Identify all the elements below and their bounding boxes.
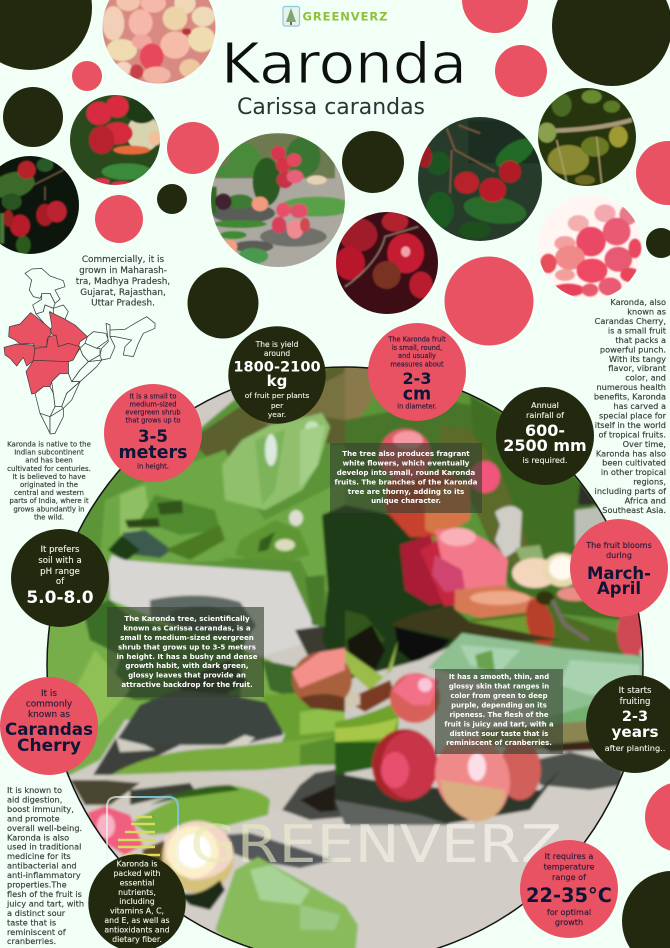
text: health benefits: anti-inflammatory bbox=[7, 870, 81, 880]
callout: temperature: growth bbox=[555, 917, 583, 927]
text: introduction: itself in the world bbox=[595, 420, 666, 430]
callout: soil pH bbox=[11, 529, 109, 627]
callout: height: in height. bbox=[137, 462, 169, 470]
callout: fruit size: measures about bbox=[390, 360, 444, 368]
text: introduction: numerous health bbox=[596, 382, 666, 392]
text: health benefits: cranberries. bbox=[7, 936, 56, 946]
text: native origin: the wild. bbox=[34, 513, 64, 521]
text box: skin and flesh: reminiscent of cranberries. bbox=[446, 739, 552, 747]
text box: skin and flesh bbox=[435, 669, 563, 754]
photo: red fruits on leafy branch bbox=[70, 95, 160, 185]
text: health benefits: overall well-being. bbox=[7, 823, 82, 833]
text box: tree description: growth habit, with dark green, bbox=[125, 661, 249, 670]
text box: tree description: The Karonda tree, scientifically bbox=[124, 614, 250, 623]
callout: temperature: temperature bbox=[544, 862, 594, 872]
text box: skin and flesh: fruit is juicy and tart, with a bbox=[444, 720, 554, 728]
text: health benefits: properties.The bbox=[7, 880, 67, 890]
text: native origin: parts of India, where it bbox=[9, 497, 89, 505]
callout: yield: around bbox=[264, 349, 290, 358]
photo: pile of pale karonda fruit bbox=[102, 0, 216, 84]
callout: fruit size: The Karonda fruit bbox=[387, 336, 446, 344]
text box: skin and flesh: distinct sour taste that is bbox=[450, 730, 548, 738]
callout: bloom season: March- bbox=[587, 564, 651, 583]
text box: flowers and thorns bbox=[330, 443, 482, 513]
callout: fruit size bbox=[368, 323, 466, 421]
text: introduction: With its tangy bbox=[609, 354, 666, 364]
callout: yield: of fruit per plants bbox=[245, 391, 309, 400]
text: introduction: including parts of bbox=[595, 486, 667, 496]
text: native origin: central and western bbox=[14, 489, 84, 497]
callout: yield: year. bbox=[268, 410, 286, 419]
photo: close-up of glossy crimson fruit bbox=[336, 212, 438, 314]
callout: nutrients: antioxidants and bbox=[104, 925, 170, 934]
text: commercial growing regions bbox=[76, 255, 170, 308]
text box: skin and flesh: color from green to deep bbox=[450, 692, 548, 700]
callout: bloom season: The fruit blooms bbox=[585, 541, 652, 550]
callout: fruiting age: years bbox=[612, 723, 658, 741]
callout: rainfall: is required. bbox=[522, 456, 568, 465]
title: Karonda bbox=[221, 32, 467, 97]
text: introduction: regions, bbox=[633, 477, 666, 487]
text: introduction: Over time, bbox=[623, 439, 666, 449]
icon: tree logo bbox=[283, 6, 300, 26]
callout: common name: commonly bbox=[26, 700, 72, 710]
text: introduction: color, and bbox=[625, 373, 666, 383]
subtitle: scientific name: Carissa carandas bbox=[237, 95, 425, 120]
callout: height: that grows up to bbox=[125, 416, 181, 424]
text: introduction: been cultivated bbox=[602, 458, 666, 468]
text: health benefits: taste that is bbox=[7, 917, 56, 927]
callout: fruit size: and usually bbox=[398, 352, 436, 360]
text: native origin: originated in the bbox=[20, 481, 78, 489]
text: introduction: is a small fruit bbox=[608, 325, 667, 335]
text box: flowers and thorns: unique character. bbox=[371, 496, 441, 505]
text: native origin: grows abundantly in bbox=[13, 505, 85, 513]
text: health benefits: reminiscent of bbox=[7, 927, 67, 937]
callout: yield bbox=[228, 326, 326, 424]
text: introduction: flavor, vibrant bbox=[608, 363, 667, 373]
text: introduction bbox=[594, 297, 667, 515]
callout: rainfall: 600- bbox=[525, 421, 565, 440]
text: introduction: that packs a bbox=[615, 335, 666, 345]
callout: common name: known as bbox=[28, 710, 70, 720]
callout: fruit size: is small, round, bbox=[392, 344, 442, 352]
callout: rainfall: Annual bbox=[531, 401, 559, 410]
callout: nutrients: and E, as well as bbox=[104, 916, 170, 925]
callout: temperature: for optimal bbox=[547, 907, 591, 917]
large circular illustration of karonda fruit and leaves bbox=[30, 350, 660, 948]
photo: bright pink fruit pile on white bbox=[538, 195, 642, 299]
text: introduction: Africa and bbox=[625, 496, 666, 506]
callout: nutrients: vitamins A, C, bbox=[110, 907, 164, 916]
callout: height: medium-sized bbox=[129, 400, 177, 408]
text box: skin and flesh: It has a smooth, thin, and bbox=[449, 673, 549, 681]
callout: bloom season: April bbox=[597, 579, 641, 598]
text box: flowers and thorns: tree are thorny, adding to its bbox=[348, 487, 464, 496]
callout: fruiting age: after planting.. bbox=[605, 743, 665, 753]
callout: soil pH: 5.0-8.0 bbox=[26, 588, 94, 608]
text: health benefits: It is known to bbox=[7, 785, 62, 795]
callout: fruiting age: 2-3 bbox=[622, 709, 648, 725]
text box: skin and flesh: ripeness. The flesh of the bbox=[449, 711, 549, 719]
callout: nutrients: dietary fiber. bbox=[112, 935, 162, 944]
callout: fruiting age bbox=[586, 675, 670, 773]
text: commercial growing regions: grown in Maharash- bbox=[79, 266, 167, 276]
text: introduction: has carved a bbox=[613, 401, 666, 411]
text: introduction: Southeast Asia. bbox=[602, 505, 666, 515]
logo bbox=[283, 6, 388, 26]
callout: nutrients: Karonda is bbox=[117, 860, 157, 868]
text: health benefits: flesh of the fruit is bbox=[7, 889, 82, 899]
text box: tree description: glossy leaves that provide an bbox=[128, 671, 246, 680]
callout: soil pH: of bbox=[56, 577, 65, 587]
text: commercial growing regions: Commercially, it is bbox=[82, 255, 165, 265]
callout: yield: The is yield bbox=[255, 340, 299, 349]
text: native origin: It is believed to have bbox=[12, 473, 86, 481]
callout: common name bbox=[0, 677, 98, 775]
callout: common name: Carandas bbox=[5, 719, 93, 739]
photo: dark red fruits with black background bbox=[0, 155, 80, 255]
text box: tree description: in height. It has a bushy and dense bbox=[116, 652, 258, 661]
photo: fruit clusters on stone ground bbox=[211, 133, 345, 267]
text box: tree description: shrub that grows up to 3-5 meters bbox=[118, 642, 256, 651]
text: health benefits: boost immunity, bbox=[7, 804, 74, 814]
callout: yield: 1800-2100 bbox=[233, 358, 321, 376]
text box: flowers and thorns: The tree also produces fragrant bbox=[342, 449, 470, 458]
callout: height: 3-5 bbox=[138, 427, 168, 446]
text box: tree description: small to medium-sized evergreen bbox=[120, 633, 254, 642]
callout: height: meters bbox=[119, 443, 187, 463]
text: health benefits: and promote bbox=[7, 813, 60, 823]
text: introduction: Karonda, also bbox=[610, 297, 666, 307]
callout: height: evergreen shrub bbox=[125, 408, 181, 416]
text: introduction: Karonda has also bbox=[596, 448, 666, 458]
watermark logo over illustration: GREENVERZ bbox=[190, 815, 562, 875]
callout: temperature: range of bbox=[552, 872, 586, 882]
text: health benefits: medicine for its bbox=[7, 851, 71, 861]
logo: GREENVERZ bbox=[302, 10, 388, 24]
callout: temperature: 22-35°C bbox=[526, 884, 612, 907]
callout: nutrients bbox=[88, 854, 186, 948]
callout: common name: Cherry bbox=[17, 736, 81, 756]
callout: rainfall bbox=[496, 387, 594, 485]
photo: red fruits on dark green branch bbox=[415, 115, 545, 245]
callout: common name: It is bbox=[41, 689, 57, 699]
text box: flowers and thorns: fruits. The branches of the Karonda bbox=[335, 477, 478, 486]
text: health benefits: aid digestion, bbox=[7, 794, 62, 804]
watermark logo over illustration bbox=[107, 797, 562, 875]
callout: bloom season: during bbox=[606, 551, 632, 560]
callout: rainfall: rainfall of bbox=[526, 411, 564, 420]
text box: flowers and thorns: white flowers, which eventually bbox=[343, 458, 470, 468]
text box: tree description: attractive backdrop for the fruit. bbox=[121, 680, 253, 689]
callout: fruit size: cm bbox=[403, 384, 431, 404]
text: native origin: cultivated for centuries. bbox=[7, 465, 91, 473]
text: introduction: of tropical fruits. bbox=[598, 429, 666, 439]
callout: fruiting age: It starts bbox=[619, 686, 652, 696]
text: commercial growing regions: Gujarat, Rajasthan, bbox=[80, 288, 166, 298]
text: introduction: benefits, Karonda bbox=[594, 392, 666, 402]
callout: nutrients: packed with bbox=[113, 869, 161, 878]
callout: fruiting age: fruiting bbox=[620, 697, 650, 707]
text box: tree description: known as Carissa carandas, is a bbox=[123, 623, 251, 632]
text: health benefits: juicy and tart, with bbox=[6, 898, 84, 908]
callout: nutrients: including bbox=[119, 897, 155, 906]
text: health benefits: a distinct sour bbox=[7, 908, 66, 918]
map of India with growing states highlighted bbox=[4, 268, 155, 434]
callout: fruit size: in diameter. bbox=[397, 402, 437, 410]
callout: yield: per bbox=[271, 401, 284, 410]
text: introduction: Carandas Cherry, bbox=[595, 316, 666, 326]
callout: height: It is a small to bbox=[129, 392, 177, 400]
callout: yield: kg bbox=[267, 372, 287, 390]
callout: nutrients: nutrients, bbox=[118, 888, 156, 897]
callout: soil pH: pH range bbox=[40, 567, 80, 577]
callout: nutrients: essential bbox=[120, 878, 154, 887]
text: health benefits: used in traditional bbox=[7, 842, 81, 852]
text box: skin and flesh: glossy skin that ranges in bbox=[449, 682, 549, 690]
text: health benefits: antibacterial and bbox=[7, 861, 77, 871]
photo: green unripe fruit on thorny branch bbox=[538, 88, 636, 186]
text: native origin: Karonda is native to the bbox=[7, 440, 91, 448]
text: native origin bbox=[7, 440, 91, 521]
callout: soil pH: soil with a bbox=[38, 556, 82, 566]
text: native origin: and has been bbox=[25, 457, 73, 465]
text box: flowers and thorns: develop into small, round Karonda bbox=[337, 468, 475, 477]
text: introduction: powerful punch. bbox=[600, 344, 666, 354]
callout: temperature bbox=[520, 840, 618, 938]
callout: fruit size: 2-3 bbox=[403, 369, 431, 388]
text: native origin: Indian subcontinent bbox=[14, 449, 84, 457]
callout: bloom season bbox=[570, 519, 668, 617]
text box: skin and flesh: purple, depending on its bbox=[451, 701, 547, 709]
callout: height bbox=[104, 384, 202, 482]
callout: soil pH: It prefers bbox=[40, 545, 80, 555]
text: health benefits bbox=[6, 785, 84, 946]
text box: tree description bbox=[107, 607, 264, 697]
callout: rainfall: 2500 mm bbox=[503, 436, 587, 455]
text: introduction: special place for bbox=[599, 410, 667, 420]
callout: temperature: It requires a bbox=[545, 851, 593, 861]
text: introduction: known as bbox=[627, 306, 666, 316]
text: commercial growing regions: tra, Madhya Pradesh, bbox=[76, 277, 170, 287]
text: commercial growing regions: Uttar Pradesh. bbox=[91, 298, 155, 308]
green right of dark band bbox=[263, 692, 337, 744]
text: introduction: in other tropical bbox=[601, 467, 666, 477]
text: health benefits: Karonda is also bbox=[7, 832, 69, 842]
